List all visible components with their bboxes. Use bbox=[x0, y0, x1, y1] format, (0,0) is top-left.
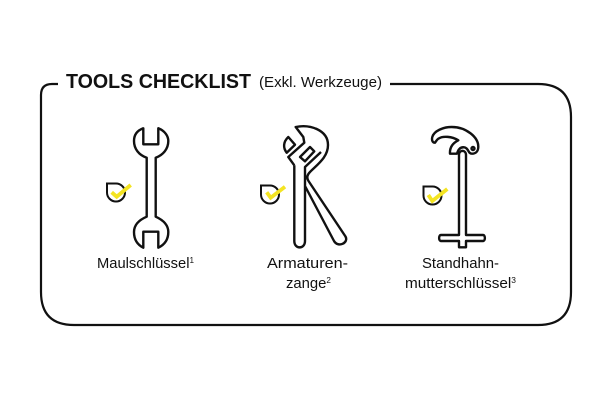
panel frame bbox=[41, 84, 571, 325]
label: Standhahnmutterschlüssel: mutterschlüssel bbox=[405, 276, 506, 292]
label: Armaturenzange: 2 bbox=[326, 276, 332, 285]
label: Standhahnmutterschlüssel: 3 bbox=[511, 276, 517, 285]
label: Maulschlüssel: 1 bbox=[189, 256, 195, 265]
subtitle: (Exkl. Werkzeuge) bbox=[259, 74, 382, 91]
icon: open-end wrench bbox=[134, 128, 168, 248]
icon: check badge 3 bbox=[424, 186, 447, 205]
label: Armaturenzange: zange bbox=[286, 276, 326, 292]
label: Armaturenzange: Armaturen- bbox=[267, 256, 348, 272]
label: Maulschlüssel: Maulschlüssel bbox=[97, 256, 188, 272]
icon: water pump pliers bbox=[284, 126, 346, 247]
icon: hydrant nut wrench bbox=[432, 127, 485, 247]
icon: check badge 2 bbox=[261, 186, 285, 204]
label: Standhahnmutterschlüssel: Standhahn- bbox=[422, 256, 499, 272]
title: TOOLS CHECKLIST bbox=[66, 70, 251, 93]
icon: check badge 1 bbox=[107, 184, 131, 202]
label: Armaturenzange bbox=[267, 256, 348, 292]
label: Standhahnmutterschlüssel bbox=[405, 256, 517, 292]
